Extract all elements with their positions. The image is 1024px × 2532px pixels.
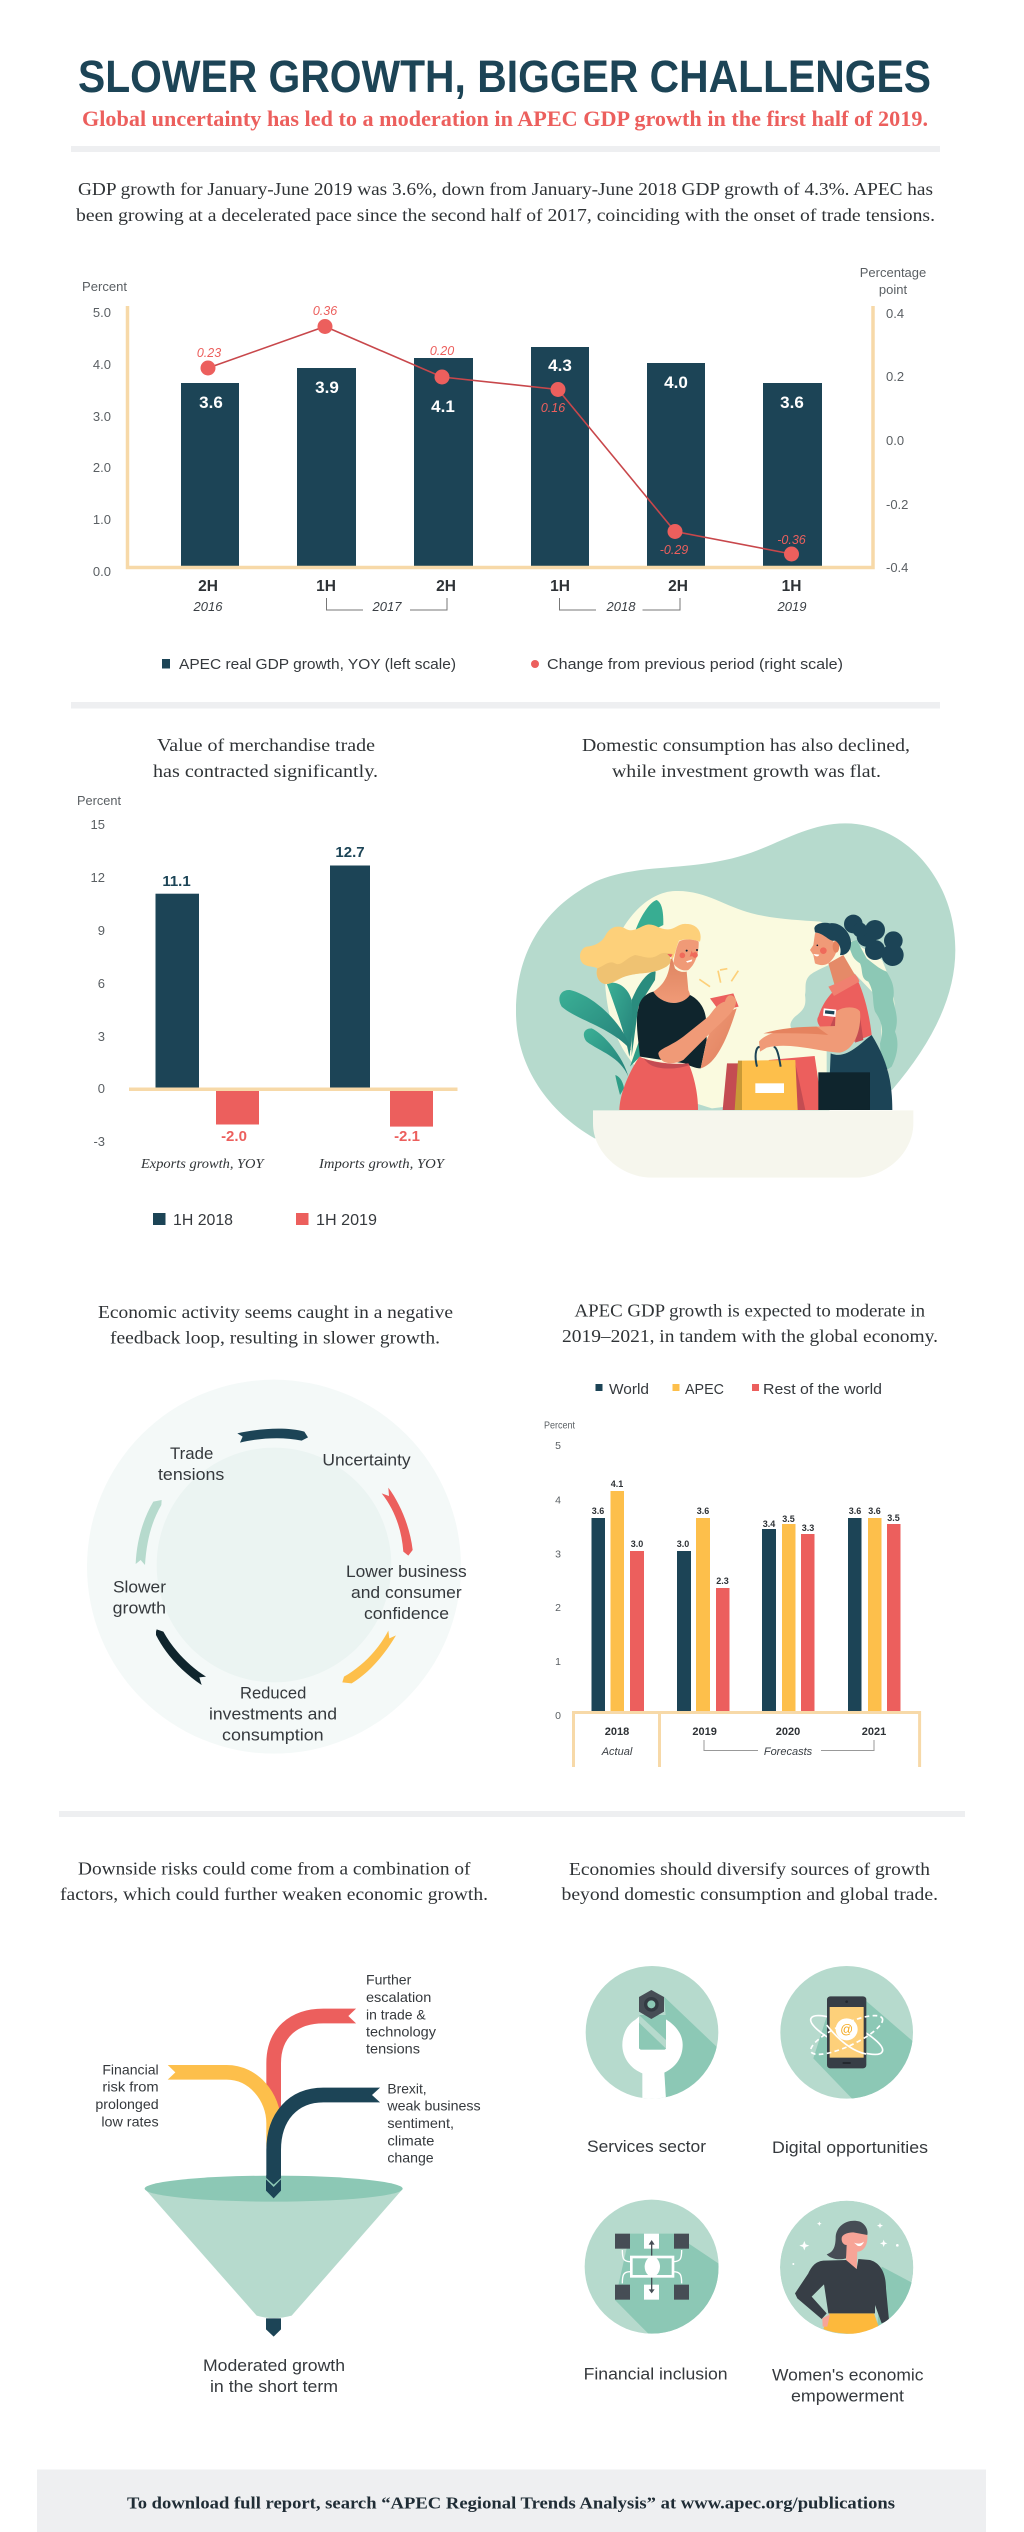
- icon labels: Services sector: [587, 2137, 706, 2156]
- loop labels: investments and: [209, 1704, 337, 1723]
- subtitle: Global uncertainty has led to a moderation in APEC GDP growth in the first half of 2019.: [82, 106, 928, 131]
- risk labels: tensions: [366, 2041, 420, 2057]
- heading: downside risks: factors, which could further weaken economic growth.: [60, 1884, 488, 1904]
- funnel result label: [203, 2356, 345, 2396]
- risk labels: escalation: [366, 1989, 431, 2005]
- loop labels: Slower: [113, 1578, 166, 1597]
- title: SLOWER GROWTH, BIGGER CHALLENGES: [78, 51, 931, 102]
- risk labels: Further: [366, 1972, 412, 1988]
- APEC bars: [610, 1491, 882, 1711]
- year labels: 2021: [862, 1726, 886, 1738]
- background blob: [516, 823, 955, 1138]
- ribbon: navy: [274, 2095, 380, 2178]
- risk labels: weak business: [386, 2098, 481, 2114]
- category labels: Imports growth, YOY: [318, 1157, 446, 1172]
- axis labels: 9: [98, 923, 105, 938]
- icon: phone: @: [840, 2023, 853, 2037]
- change values: [197, 304, 806, 557]
- year labels: 2018: [606, 599, 636, 614]
- bar values: 4.1: [611, 1479, 623, 1489]
- bar values: 3.6: [868, 1506, 881, 1516]
- left axis labels: 5.0: [93, 305, 111, 320]
- heading: domestic consumption: while investment growth was flat.: [612, 761, 881, 781]
- arrow: yellow: [342, 1631, 396, 1683]
- footer band: To download full report, search “APEC Regional Trends Analysis” at www.apec.org/publications: [127, 2494, 895, 2513]
- bar values: 4.0: [664, 373, 688, 392]
- loop labels: Trade: [170, 1444, 213, 1463]
- plant: [559, 900, 663, 1095]
- period labels: 1H: [782, 578, 801, 595]
- bar values: 3.5: [887, 1513, 900, 1523]
- actual / forecasts: [601, 1746, 813, 1758]
- values: -2.1: [394, 1128, 420, 1145]
- arrow: mint: [136, 1500, 162, 1565]
- customer: [580, 924, 739, 1110]
- period labels: 1H: [550, 578, 570, 595]
- heading: domestic consumption: [582, 735, 910, 781]
- axis labels: 2: [555, 1602, 561, 1614]
- counter: [593, 1110, 913, 1178]
- bar values: [199, 356, 804, 416]
- axis labels: 5: [555, 1440, 561, 1452]
- chart: APEC GDP growth combo chart: Percentage: [860, 265, 926, 280]
- year labels: 2016: [193, 599, 223, 614]
- heading: merchandise trade: Value of merchandise trade: [157, 735, 375, 755]
- bars: [156, 866, 433, 1127]
- ribbon: red: [274, 2016, 356, 2110]
- year labels: [193, 599, 806, 614]
- axis labels: 1: [555, 1656, 561, 1668]
- legend: [153, 1212, 377, 1229]
- diagram: funnel of downside risks: [95, 1972, 481, 2337]
- funnel result label: Moderated growth: [203, 2356, 345, 2375]
- heading: diversify: beyond domestic consumption and global trade.: [562, 1884, 938, 1904]
- period labels: [198, 578, 801, 595]
- icon: wrench: [586, 1966, 718, 2100]
- chart: APEC GDP growth combo chart: point: [879, 282, 907, 297]
- chart: merchandise trade: [77, 793, 458, 1229]
- year labels: 2020: [776, 1726, 800, 1738]
- bar values: 3.6: [592, 1506, 604, 1516]
- left axis labels: [93, 305, 111, 579]
- footer band: [37, 2470, 986, 2532]
- bar values: 3.0: [631, 1539, 643, 1549]
- bar values: 3.6: [199, 393, 223, 412]
- left axis labels: 2.0: [93, 460, 111, 475]
- heading: feedback loop: [98, 1302, 453, 1348]
- change values: -0.36: [777, 533, 806, 547]
- loop labels: confidence: [364, 1604, 449, 1623]
- axis labels: -3: [93, 1134, 105, 1149]
- intro paragraph: been growing at a decelerated pace since the second half of 2017, coinciding with the onset of trade tensions.: [76, 205, 935, 225]
- right axis labels: [886, 306, 908, 575]
- icon labels: Digital opportunities: [772, 2138, 928, 2157]
- period labels: 2H: [436, 578, 456, 595]
- icon: phone: [780, 1966, 913, 2100]
- legend: forecast chart: [596, 1381, 882, 1398]
- funnel: [145, 2176, 403, 2318]
- bar values: 3.6: [697, 1506, 709, 1516]
- icon: money flow: [585, 2200, 719, 2334]
- arrow: navy: [237, 1429, 308, 1443]
- icon labels: empowerment: [791, 2387, 904, 2406]
- legend: GDP chart: APEC real GDP growth, YOY (left scale): [179, 656, 456, 673]
- bar values: 2.3: [716, 1576, 729, 1586]
- period labels: 2H: [668, 578, 688, 595]
- heading: downside risks: Downside risks could come from a combination of: [78, 1858, 470, 1878]
- axis labels: 6: [98, 976, 105, 991]
- left axis labels: 4.0: [93, 357, 111, 372]
- change values: 0.23: [197, 346, 221, 360]
- risk labels: [95, 1972, 481, 2166]
- bar values: 3.5: [782, 1514, 795, 1524]
- heading: diversify: [562, 1859, 938, 1904]
- left axis labels: 1.0: [93, 512, 111, 527]
- loop labels: and consumer: [351, 1583, 462, 1602]
- heading: merchandise trade: has contracted significantly.: [153, 761, 378, 781]
- risk labels: technology: [366, 2024, 436, 2040]
- values: 11.1: [162, 873, 191, 890]
- heading: merchandise trade: [153, 735, 378, 781]
- chart: merchandise trade: Percent: [77, 793, 121, 808]
- chart: GDP forecast: [544, 1420, 920, 1767]
- legend: forecast chart: Rest of the world: [763, 1381, 882, 1398]
- values: -2.0: [221, 1128, 247, 1145]
- right axis labels: 0.2: [886, 369, 904, 384]
- world bars: [592, 1518, 862, 1711]
- axis labels: 0: [98, 1081, 105, 1096]
- axis labels: 0: [555, 1710, 561, 1722]
- heading: GDP forecast: 2019–2021, in tandem with the global economy.: [562, 1326, 938, 1346]
- icon labels: [584, 2137, 928, 2406]
- axis labels: 3: [98, 1029, 105, 1044]
- bar values: 3.3: [802, 1523, 814, 1533]
- legend: forecast chart: World: [609, 1381, 649, 1398]
- left axis labels: 3.0: [93, 409, 111, 424]
- year labels: 2019: [777, 599, 806, 614]
- chart frame: [128, 306, 873, 568]
- right axis labels: 0.0: [886, 433, 904, 448]
- legend: GDP chart: Change from previous period (right scale): [547, 656, 843, 673]
- period labels: 2H: [198, 578, 218, 595]
- bar values: 3.6: [849, 1506, 861, 1516]
- ribbon tips: [266, 2175, 281, 2337]
- ribbon: yellow: [168, 2072, 274, 2147]
- heading: domestic consumption: Domestic consumption has also declined,: [582, 735, 910, 755]
- icon labels: Women's economic: [772, 2366, 924, 2384]
- heading: GDP forecast: APEC GDP growth is expected to moderate in: [574, 1300, 925, 1320]
- axis labels: [555, 1440, 561, 1722]
- legend: 1H 2018: [173, 1212, 233, 1229]
- saleswoman flowing shadow: [790, 940, 897, 1073]
- saleswoman: [759, 915, 904, 1110]
- icons: growth sources: [585, 1966, 913, 2335]
- change values: 0.16: [541, 401, 565, 415]
- axis labels: 4: [555, 1494, 561, 1506]
- illustration: shoppers at counter: [516, 823, 955, 1178]
- category labels: Exports growth, YOY: [140, 1157, 266, 1172]
- chart: GDP forecast: Percent: [544, 1420, 575, 1432]
- bars: [181, 347, 822, 566]
- actual / forecasts: Actual: [601, 1746, 633, 1758]
- right axis labels: -0.4: [886, 560, 908, 575]
- loop labels: consumption: [222, 1725, 324, 1744]
- risk labels: in trade &: [366, 2006, 426, 2022]
- risk labels: climate: [387, 2132, 435, 2148]
- heading: downside risks: [60, 1858, 488, 1904]
- bar values: 4.3: [548, 356, 572, 375]
- heading: GDP forecast: [562, 1300, 938, 1346]
- heading: diversify: Economies should diversify sources of growth: [569, 1859, 930, 1879]
- risk labels: low rates: [101, 2113, 159, 2129]
- risk labels: prolonged: [95, 2096, 159, 2112]
- values: [162, 844, 420, 1145]
- bar values: 3.9: [315, 378, 339, 397]
- arrow: dark: [156, 1629, 206, 1685]
- risk labels: sentiment,: [387, 2115, 454, 2131]
- axis labels: 12: [91, 870, 105, 885]
- risk labels: Financial: [102, 2062, 159, 2078]
- bar values: 4.1: [431, 397, 455, 416]
- intro paragraph: GDP growth for January-June 2019 was 3.6%, down from January-June 2018 GDP growth of 4.3%. APEC has: [78, 179, 933, 199]
- year labels: 2019: [692, 1726, 717, 1738]
- left axis labels: 0.0: [93, 564, 111, 579]
- legend: 1H 2019: [316, 1212, 377, 1229]
- year labels: [605, 1726, 886, 1738]
- actual / forecasts: Forecasts: [764, 1746, 813, 1758]
- diagram: feedback loop: [87, 1380, 467, 1754]
- right axis labels: 0.4: [886, 306, 904, 321]
- bar values: 3.6: [780, 393, 804, 412]
- chart: APEC GDP growth combo chart: [82, 265, 926, 614]
- loop labels: [113, 1444, 467, 1744]
- chart: APEC GDP growth combo chart: Percent: [82, 279, 127, 294]
- funnel result label: in the short term: [210, 2377, 338, 2396]
- heading: feedback loop: Economic activity seems caught in a negative: [98, 1302, 453, 1322]
- risk labels: risk from: [102, 2079, 159, 2095]
- year labels: 2018: [605, 1726, 629, 1738]
- bar values: 3.4: [763, 1519, 775, 1529]
- change values: 0.36: [313, 304, 337, 318]
- icon: businesswoman: [780, 2201, 913, 2335]
- bar values: 3.0: [677, 1539, 689, 1549]
- icon labels: Financial inclusion: [584, 2365, 728, 2384]
- period labels: 1H: [316, 578, 336, 595]
- loop labels: Reduced: [240, 1683, 306, 1702]
- loop labels: Lower business: [346, 1562, 467, 1581]
- axis labels: [91, 817, 105, 1149]
- risk labels: Brexit,: [387, 2080, 427, 2096]
- shopping bags: [723, 1047, 823, 1110]
- loop labels: growth: [113, 1599, 166, 1618]
- axis labels: 15: [91, 817, 105, 832]
- legend: forecast chart: APEC: [685, 1381, 724, 1398]
- arrow: red: [382, 1488, 413, 1556]
- rest of world bars: [630, 1524, 900, 1711]
- year labels: 2017: [372, 599, 402, 614]
- legend: GDP chart: [162, 656, 843, 673]
- values: 12.7: [335, 844, 365, 861]
- loop labels: Uncertainty: [322, 1450, 411, 1469]
- right axis labels: -0.2: [886, 497, 908, 512]
- change dots: [200, 319, 799, 562]
- loop labels: tensions: [158, 1465, 224, 1484]
- bar values: [592, 1479, 900, 1586]
- heading: feedback loop: feedback loop, resulting in slower growth.: [110, 1328, 440, 1348]
- intro paragraph: [76, 179, 935, 225]
- category labels: [140, 1157, 446, 1172]
- change values: -0.29: [660, 543, 688, 557]
- change line: [208, 326, 792, 554]
- change values: 0.20: [430, 344, 454, 358]
- risk labels: change: [387, 2150, 434, 2166]
- axis labels: 3: [555, 1548, 561, 1560]
